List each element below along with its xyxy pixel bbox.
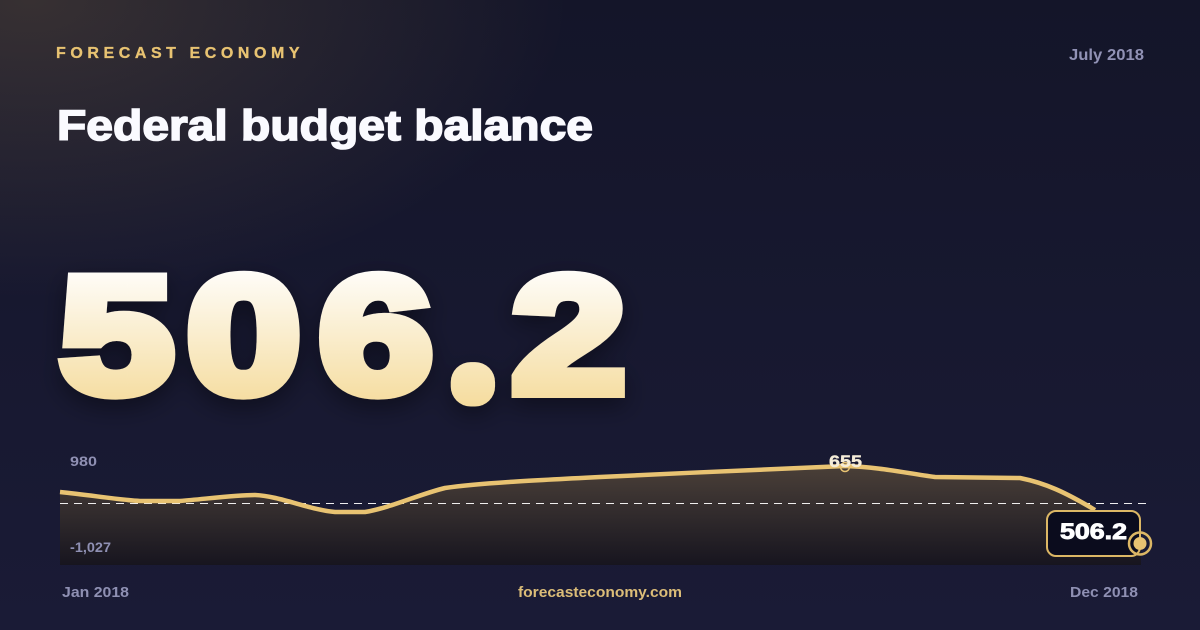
big value: . bbox=[469, 361, 477, 394]
title: Federal budget balance bbox=[57, 102, 593, 150]
line bbox=[60, 466, 1095, 512]
area fill bbox=[60, 466, 1141, 565]
big value: 506 bbox=[60, 244, 433, 428]
axis min: -1,027 bbox=[70, 539, 111, 555]
axis max: 980 bbox=[70, 453, 97, 469]
big value bbox=[60, 244, 626, 428]
value callout: 506.2 bbox=[1060, 519, 1127, 544]
start date: Jan 2018 bbox=[62, 584, 129, 601]
value callout bbox=[1047, 511, 1140, 556]
sparkline chart bbox=[60, 452, 1151, 565]
source: forecasteconomy.com bbox=[518, 584, 682, 601]
end date: Dec 2018 bbox=[1070, 584, 1138, 601]
big value: 2 bbox=[512, 244, 626, 428]
end marker bbox=[1129, 532, 1151, 554]
zero line bbox=[60, 502, 1147, 504]
date: July 2018 bbox=[1069, 47, 1144, 64]
peak label: 655 bbox=[829, 452, 862, 471]
brand label: FORECAST ECONOMY bbox=[56, 45, 304, 62]
peak marker bbox=[840, 462, 850, 472]
